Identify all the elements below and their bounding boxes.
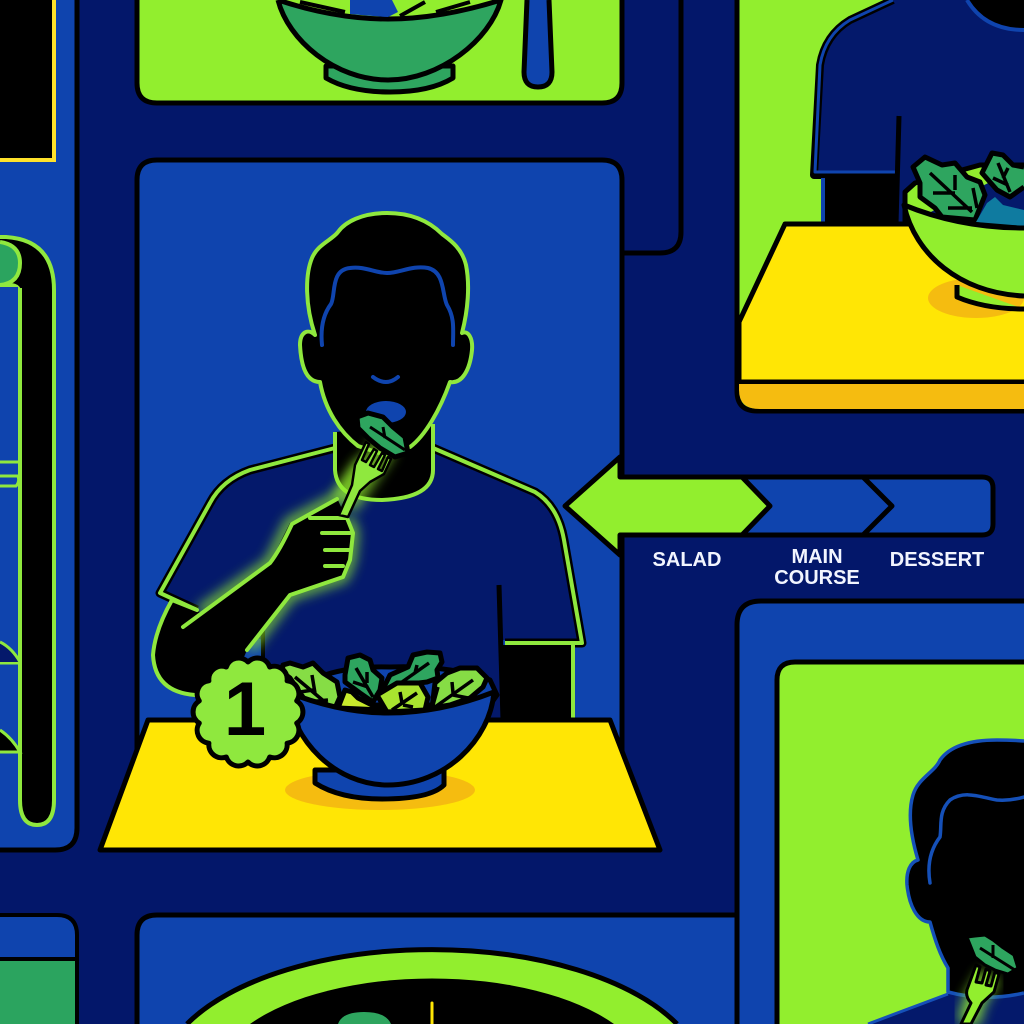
panel: main scene, step 1 salad (137, 160, 622, 750)
glow around hand and fork (200, 462, 362, 648)
bowl shadow (285, 770, 475, 810)
labels: SALAD (653, 549, 721, 571)
black frame with yellow border (0, 0, 54, 160)
plate rim (187, 950, 677, 1024)
bowl shadow (928, 278, 1024, 318)
step: salad (active) (565, 457, 770, 555)
labels (653, 546, 984, 589)
number: 1 (224, 667, 266, 752)
person torso (813, 0, 1024, 222)
hairline (929, 795, 1024, 883)
labels: DESSERT (890, 549, 984, 571)
arrow: course sequence bar (565, 457, 993, 555)
panel: left bottom green card (0, 915, 77, 1024)
bowl body (287, 692, 494, 785)
icon: salad bowl (282, 652, 497, 799)
person: man eating salad (153, 213, 582, 720)
badge: step number 1 (193, 658, 303, 766)
fork (339, 442, 391, 517)
panel: top right scene (737, 0, 1024, 411)
arm (825, 178, 897, 224)
shirt (160, 448, 582, 720)
icon: right bowl (904, 153, 1024, 309)
mouth (366, 401, 406, 423)
foot (315, 770, 444, 799)
leaves (282, 652, 487, 712)
labels: MAIN (791, 546, 843, 568)
leaf on fork (357, 413, 408, 457)
glow around fork (968, 975, 990, 1024)
head (300, 213, 472, 455)
panel: top lime place setting (137, 0, 622, 103)
step: main course (740, 477, 892, 535)
rim back (295, 667, 497, 705)
labels: COURSE (774, 567, 860, 589)
decorative connector line (622, 0, 681, 253)
leaf (967, 935, 1018, 974)
step: dessert (860, 477, 993, 535)
table edge (739, 384, 1024, 409)
panel: left partial scene (0, 0, 77, 850)
neck (335, 424, 433, 500)
table (739, 224, 1024, 382)
plate centre (250, 978, 614, 1024)
table: main yellow placemat (100, 720, 660, 850)
left arm and hand (154, 498, 353, 695)
nose (373, 377, 398, 382)
icon: spoon (524, 0, 552, 87)
green outlined tube figure (0, 237, 54, 825)
fork (961, 965, 999, 1024)
panel: bottom centre plate card (137, 915, 740, 1024)
inner lime card (777, 662, 1024, 1024)
panel: bottom right scene (737, 601, 1024, 1024)
hairline (322, 267, 453, 345)
shirt (868, 994, 1024, 1024)
head (907, 740, 1024, 997)
icon: top bowl (278, 0, 501, 92)
right arm (503, 645, 573, 720)
